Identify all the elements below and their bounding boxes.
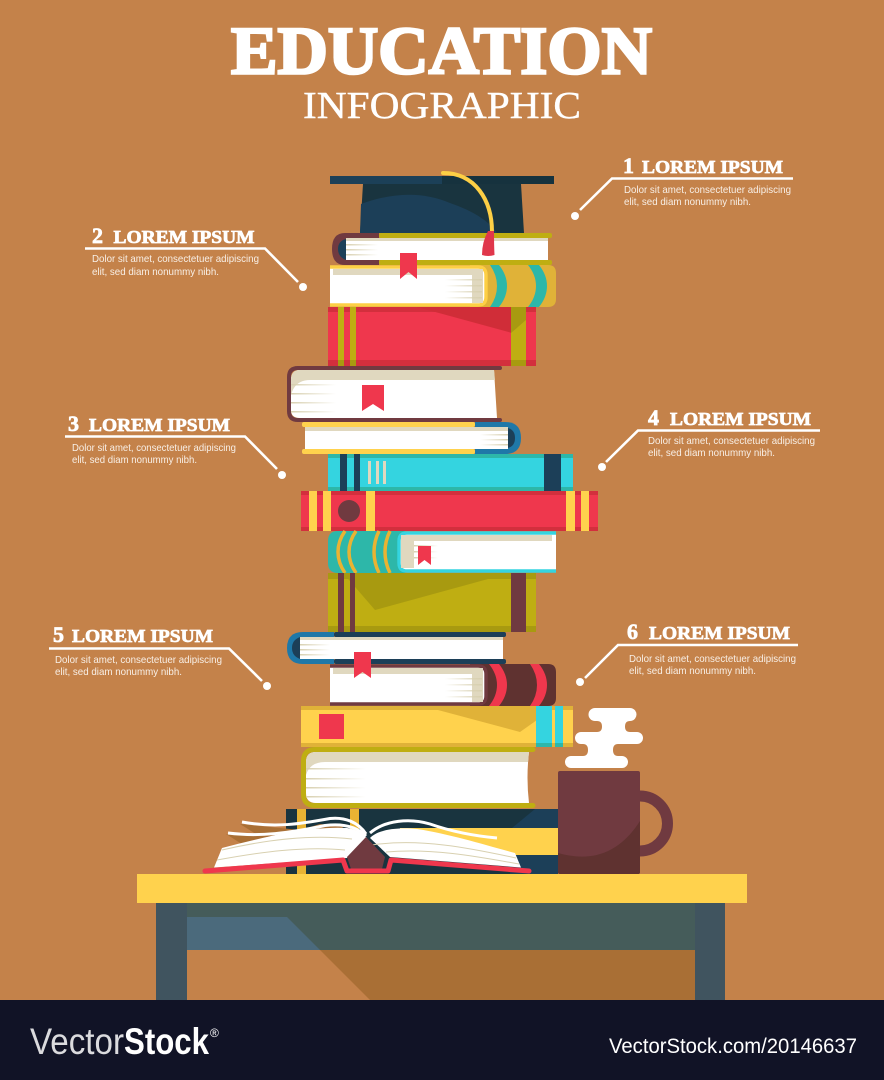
book 2: golden book	[330, 265, 556, 307]
callout 2	[85, 223, 307, 291]
book 11: dark maroon book	[330, 664, 556, 706]
callout 3: elit, sed diam nonummy nibh.	[72, 454, 197, 466]
callout 4	[598, 405, 820, 471]
callout 4: 4	[648, 405, 659, 430]
footer bar: Vector	[30, 1021, 124, 1062]
callout 1	[571, 153, 793, 220]
book 6: cyan book	[328, 454, 573, 491]
callout 1: Dolor sit amet, consectetuer adipiscing	[624, 184, 791, 196]
callout 4: LOREM IPSUM	[670, 409, 812, 429]
book 12: yellow book	[301, 706, 573, 747]
book 7: long red book	[301, 491, 598, 531]
coffee mug	[558, 771, 668, 874]
callout 2: elit, sed diam nonummy nibh.	[92, 266, 219, 278]
book 8: teal spine book	[328, 531, 556, 573]
title: EDUCATION	[231, 12, 652, 88]
footer bar: ®	[210, 1026, 219, 1040]
callout 2: 2	[92, 223, 103, 248]
icon: bookmark	[362, 385, 384, 411]
callout 6: LOREM IPSUM	[649, 623, 791, 643]
callout 3	[65, 411, 286, 479]
callout 5	[49, 622, 271, 690]
footer bar	[0, 1000, 884, 1080]
callout 5: 5	[53, 622, 64, 647]
callout 5: LOREM IPSUM	[72, 626, 214, 646]
open book	[205, 818, 529, 871]
callout 1: LOREM IPSUM	[642, 157, 784, 177]
book 5: blue spine book	[302, 422, 521, 454]
book 4: maroon book	[289, 368, 500, 420]
icon: steam	[565, 708, 643, 768]
book 10: blue and navy book	[287, 632, 506, 664]
table	[137, 874, 747, 1000]
callout 6: 6	[627, 619, 638, 644]
icon: bookmark	[400, 253, 417, 279]
callout 4: elit, sed diam nonummy nibh.	[648, 447, 775, 459]
book 14: navy book under the open book	[286, 809, 558, 874]
callout 2: LOREM IPSUM	[114, 227, 255, 247]
callout 6: Dolor sit amet, consectetuer adipiscing	[629, 653, 796, 665]
callout 3: LOREM IPSUM	[89, 415, 231, 435]
callout 2: Dolor sit amet, consectetuer adipiscing	[92, 253, 259, 265]
icon: bookmark	[354, 652, 371, 678]
callout 1: elit, sed diam nonummy nibh.	[624, 196, 751, 208]
callout 1: 1	[623, 153, 634, 178]
callout 5: Dolor sit amet, consectetuer adipiscing	[55, 654, 222, 666]
callout 3: Dolor sit amet, consectetuer adipiscing	[72, 442, 236, 454]
book 9: olive book	[328, 573, 536, 632]
callout 6: elit, sed diam nonummy nibh.	[629, 665, 756, 677]
cap string and tassel	[443, 173, 494, 256]
callout 4: Dolor sit amet, consectetuer adipiscing	[648, 435, 815, 447]
graduation cap	[330, 176, 554, 233]
callout 6	[576, 619, 798, 686]
title: INFOGRAPHIC	[303, 85, 581, 127]
title	[231, 12, 652, 127]
footer bar: VectorStock.com/20146637	[609, 1035, 857, 1058]
callout 3: 3	[68, 411, 79, 436]
footer bar: Stock	[124, 1021, 209, 1062]
book 3: red book	[328, 307, 536, 366]
book 1: olive thin book	[332, 233, 552, 265]
callout 5: elit, sed diam nonummy nibh.	[55, 666, 182, 678]
book 13: olive cover book	[304, 750, 533, 806]
